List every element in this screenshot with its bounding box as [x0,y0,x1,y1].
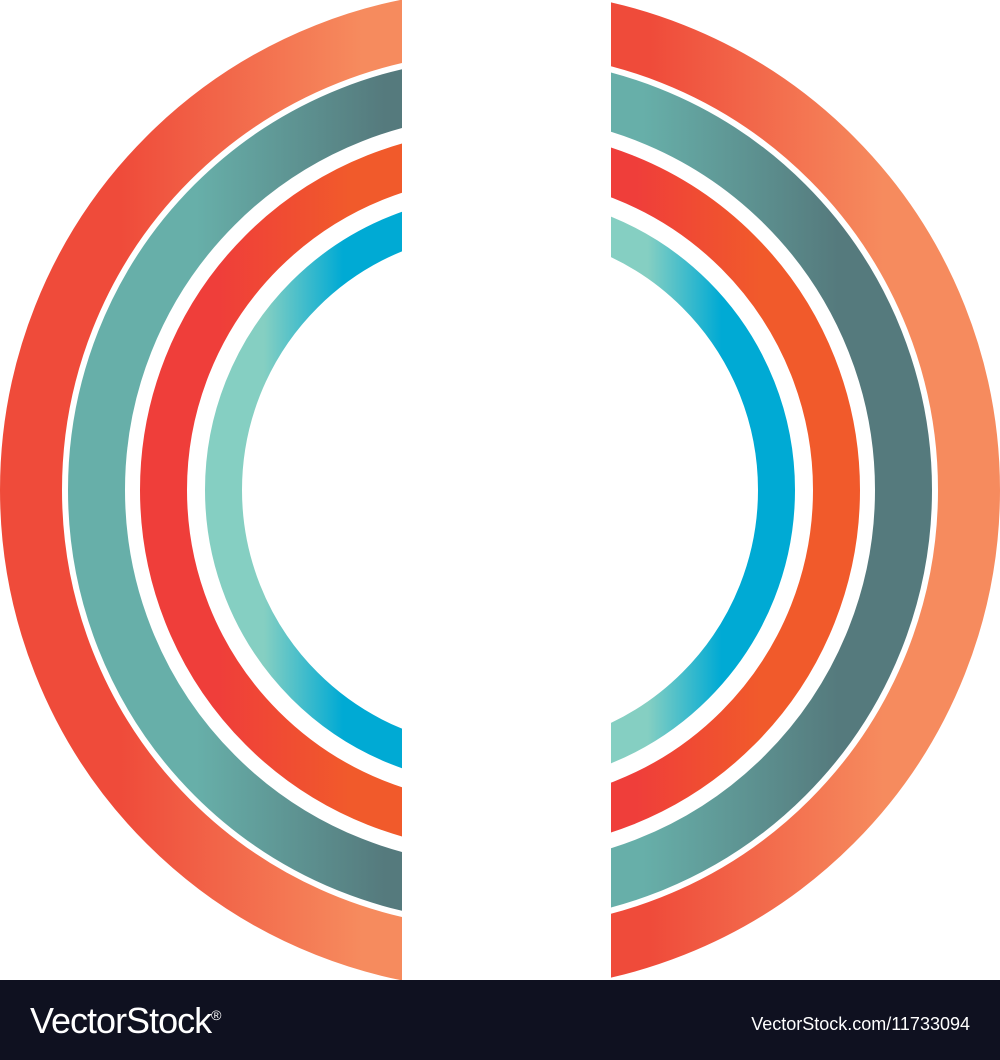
footer url text: VectorStock.com/11733094 [751,1014,970,1034]
left half rings [0,0,402,980]
footer bar [0,980,1000,1060]
right half rings [611,2,1000,978]
footer logo text: VectorStock® [30,1000,220,1041]
